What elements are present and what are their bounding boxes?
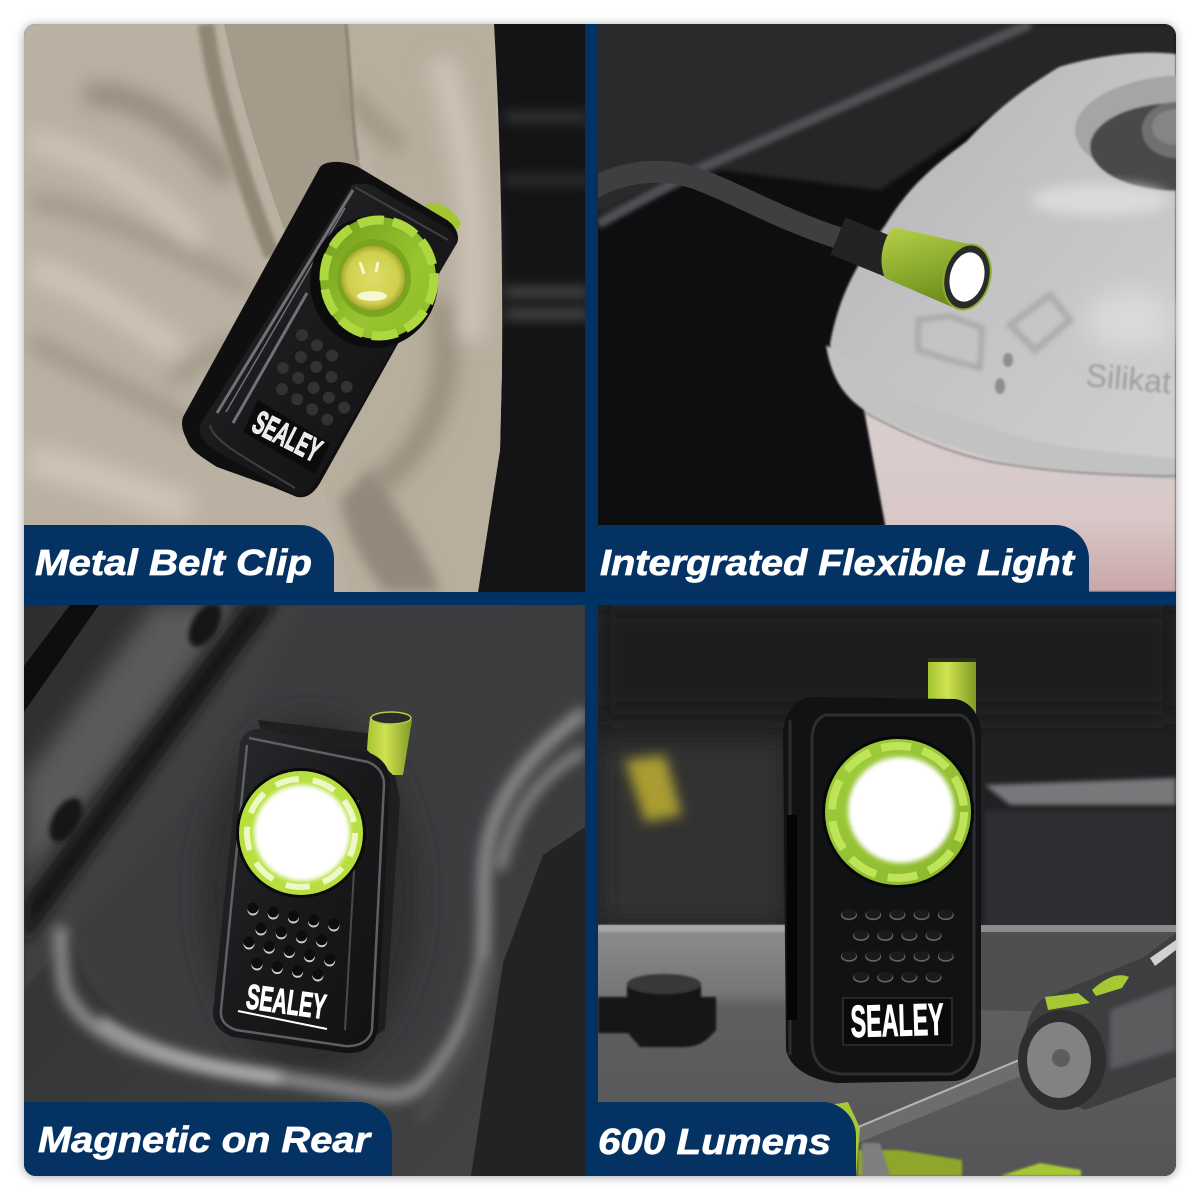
logo: SEALEY	[244, 977, 329, 1027]
lamp head	[882, 227, 997, 315]
label	[598, 525, 1089, 592]
label: Magnetic on Rear	[38, 1119, 372, 1160]
logo: SEALEY	[850, 994, 944, 1047]
label: 600 Lumens	[598, 1121, 831, 1162]
label	[24, 525, 334, 592]
label: Intergrated Flexible Light	[600, 542, 1076, 583]
flexible hose	[590, 172, 845, 240]
panel: integrated flexible light: Silikat	[1084, 357, 1173, 400]
label	[598, 1102, 856, 1176]
logo	[243, 400, 330, 474]
panel: integrated flexible light	[590, 24, 1200, 592]
panel: magnetic on rear	[24, 598, 585, 1176]
label	[24, 1102, 392, 1176]
screwdriver	[830, 933, 1176, 1176]
device: magnet lamp	[213, 712, 412, 1053]
logo	[843, 994, 952, 1047]
ratchet	[598, 974, 716, 1047]
dots	[249, 908, 334, 976]
logo	[238, 984, 328, 1030]
label: Metal Belt Clip	[35, 542, 312, 583]
device: clipped lamp	[182, 162, 461, 497]
logo: SEALEY	[247, 403, 328, 469]
light ring	[310, 216, 438, 348]
dots	[282, 335, 347, 420]
coolant tank	[826, 53, 1200, 592]
light ring	[236, 768, 366, 898]
device: lamp upright	[783, 658, 981, 1083]
dots	[849, 914, 946, 977]
panel: 600 lumens	[598, 605, 1176, 1176]
light ring	[822, 736, 974, 888]
panel: metal belt clip	[24, 24, 590, 592]
